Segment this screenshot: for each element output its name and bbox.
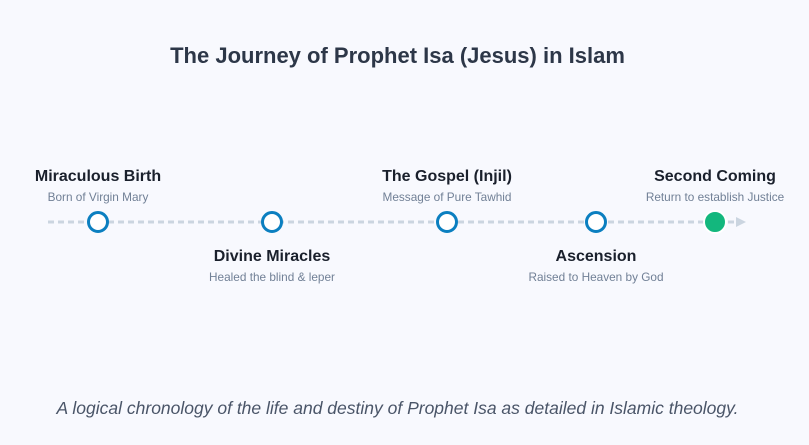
node 4 xyxy=(586,212,606,232)
label: The Gospel: The Gospel (Injil) xyxy=(382,168,512,185)
label: Divine Miracles xyxy=(209,248,335,284)
label: Divine Miracles: Divine Miracles xyxy=(214,248,330,265)
label: Ascension: Ascension xyxy=(556,248,636,265)
label: Ascension xyxy=(528,248,664,284)
label: Miraculous Birth: Born of Virgin Mary xyxy=(48,190,148,204)
label: Ascension: Raised to Heaven by God xyxy=(528,270,664,284)
node 3 xyxy=(438,212,456,232)
label: Second Coming: Return to establish Justice xyxy=(646,190,784,204)
caption: A logical chronology of the life and destiny of Prophet Isa as detailed in Islamic theology. xyxy=(57,398,738,418)
icon: arrow head xyxy=(736,217,746,227)
label: Divine Miracles: Healed the blind & leper xyxy=(209,270,335,284)
label: Second Coming: Second Coming xyxy=(654,168,776,185)
node 2 xyxy=(262,212,282,232)
title: The Journey of Prophet Isa (Jesus) in Islam xyxy=(170,43,625,68)
label: Miraculous Birth: Miraculous Birth xyxy=(35,168,161,185)
label: Second Coming xyxy=(646,168,784,204)
label: Miraculous Birth xyxy=(35,168,161,204)
label: The Gospel: Message of Pure Tawhid xyxy=(383,190,511,204)
node 1 xyxy=(88,212,108,232)
node 5 xyxy=(704,211,726,233)
label: The Gospel xyxy=(382,168,512,204)
